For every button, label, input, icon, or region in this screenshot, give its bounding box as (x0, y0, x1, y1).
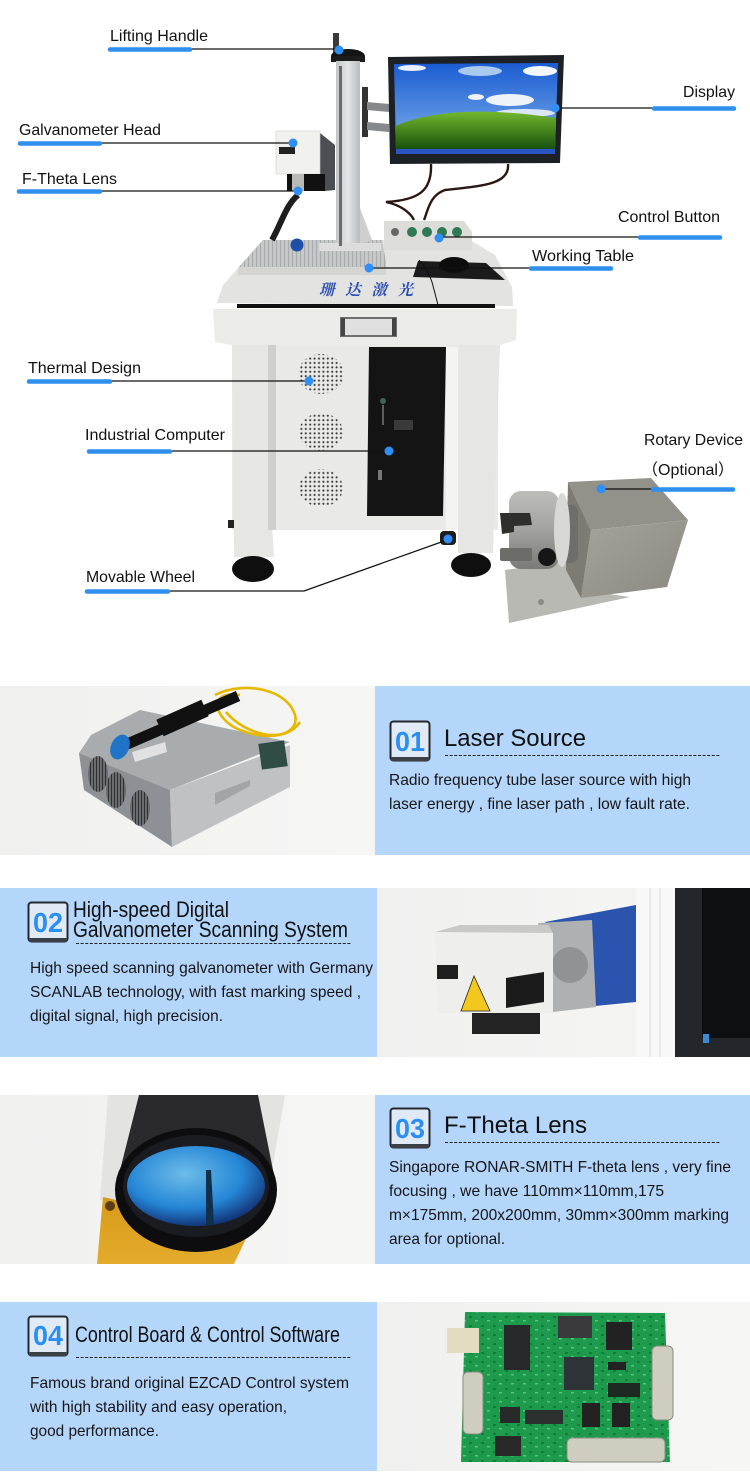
callout: thermal design (28, 360, 314, 386)
callout: f-theta lens (19, 171, 302, 196)
panel: f-theta lens (0, 1095, 750, 1264)
galvanometer head and lens (272, 131, 335, 240)
heading: Laser Source (444, 725, 586, 752)
text panel 01 (375, 686, 750, 855)
lens photo (0, 1095, 375, 1264)
badge 03 (390, 1108, 430, 1148)
badge 02 (28, 902, 68, 942)
callout: movable wheel: Movable Wheel (86, 569, 195, 586)
callout: lifting handle (110, 28, 344, 54)
panel: galvanometer scanning system (0, 888, 750, 1057)
display monitor (362, 55, 564, 220)
description: with high stability and easy operation, (29, 1399, 287, 1416)
laser source photo (0, 686, 375, 855)
table band and drawer handle (213, 309, 517, 345)
badge 01: 01 (395, 726, 425, 757)
panel: laser source (0, 686, 750, 855)
badge 03: 03 (395, 1113, 425, 1144)
text panel 03 (375, 1095, 750, 1264)
callout: lifting handle: Lifting Handle (110, 28, 208, 45)
description (30, 960, 373, 1025)
column and lifting handle (319, 33, 381, 251)
description (389, 1159, 731, 1248)
callout: display (550, 84, 735, 112)
description: High speed scanning galvanometer with Germany (30, 960, 373, 977)
description: digital signal, high precision. (30, 1008, 223, 1025)
callout: movable wheel (86, 534, 452, 592)
description: SCANLAB technology, with fast marking speed , (30, 984, 361, 1001)
description: Famous brand original EZCAD Control system (30, 1375, 349, 1392)
callout: rotary device: （Optional） (642, 461, 734, 479)
control button box (384, 221, 472, 250)
description: area for optional. (389, 1231, 505, 1248)
rotary device (500, 478, 688, 623)
galvanometer photo (377, 888, 750, 1057)
badge 01 (390, 722, 430, 761)
callout: galvanometer head (19, 122, 298, 148)
callout: control button: Control Button (618, 209, 720, 226)
badge 04: 04 (33, 1320, 63, 1351)
callout: industrial computer (85, 427, 394, 456)
description: Radio frequency tube laser source with high (389, 772, 691, 789)
brand characters: 珊达激光 (319, 278, 414, 300)
description (389, 772, 691, 813)
callout: rotary device: Rotary Device (644, 432, 743, 449)
description: focusing , we have 110mm×110mm,175 (389, 1183, 664, 1200)
badge 02: 02 (33, 907, 63, 938)
description: m×175mm, 200x200mm, 30mm×300mm marking (389, 1207, 729, 1224)
callout: working table (364, 248, 634, 272)
description: Singapore RONAR-SMITH F-theta lens , very fine (389, 1159, 731, 1176)
description (29, 1375, 349, 1440)
callout: display: Display (683, 84, 735, 101)
callout: control button (434, 209, 720, 242)
text panel 04 (0, 1302, 377, 1471)
description: good performance. (30, 1423, 159, 1440)
heading: Control Board & Control Software (75, 1322, 340, 1347)
heading: F-Theta Lens (444, 1112, 587, 1139)
description: laser energy , fine laser path , low fault rate. (389, 796, 690, 813)
heading (73, 897, 348, 942)
lower cabinet (228, 345, 500, 582)
badge 04 (28, 1316, 68, 1356)
text panel 02 (0, 888, 377, 1057)
callout: rotary device (596, 432, 743, 494)
circuit board photo (377, 1302, 750, 1471)
heading: Galvanometer Scanning System (73, 917, 348, 942)
callout: galvanometer head: Galvanometer Head (19, 122, 161, 139)
callout: working table: Working Table (532, 248, 634, 265)
heading: High-speed Digital (73, 897, 229, 922)
panel: control board and software (0, 1302, 750, 1471)
callout: industrial computer: Industrial Computer (85, 427, 226, 444)
callout: f-theta lens: F-Theta Lens (22, 171, 117, 188)
machine photo illustration (213, 33, 688, 623)
callout: thermal design: Thermal Design (28, 360, 141, 377)
working table (217, 238, 513, 308)
